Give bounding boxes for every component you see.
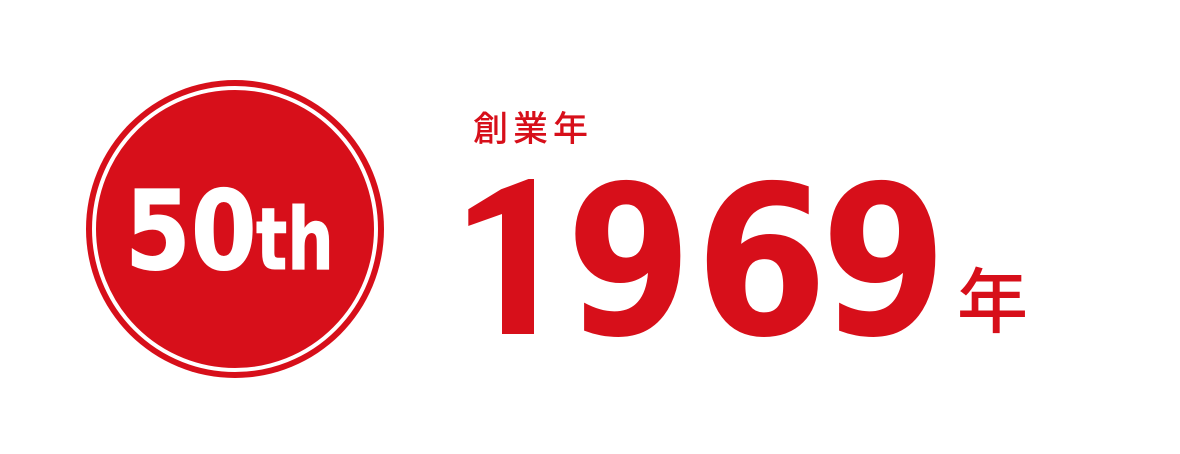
year number: 1969: 1: [446, 116, 581, 419]
badge: 50th anniversary: [86, 80, 384, 378]
badge text: 50th: [125, 168, 334, 296]
year number: 1969: 9: [821, 141, 947, 383]
badge text: 50th: 50: [125, 168, 257, 296]
year number: 1969: 6: [695, 141, 828, 384]
year number: 1969: 9: [566, 141, 692, 383]
badge text: 50th: th: [256, 190, 334, 290]
label: founding year: 創業年: [473, 110, 593, 149]
year number: 1969: [468, 179, 936, 337]
year unit: 年: [957, 264, 1028, 343]
